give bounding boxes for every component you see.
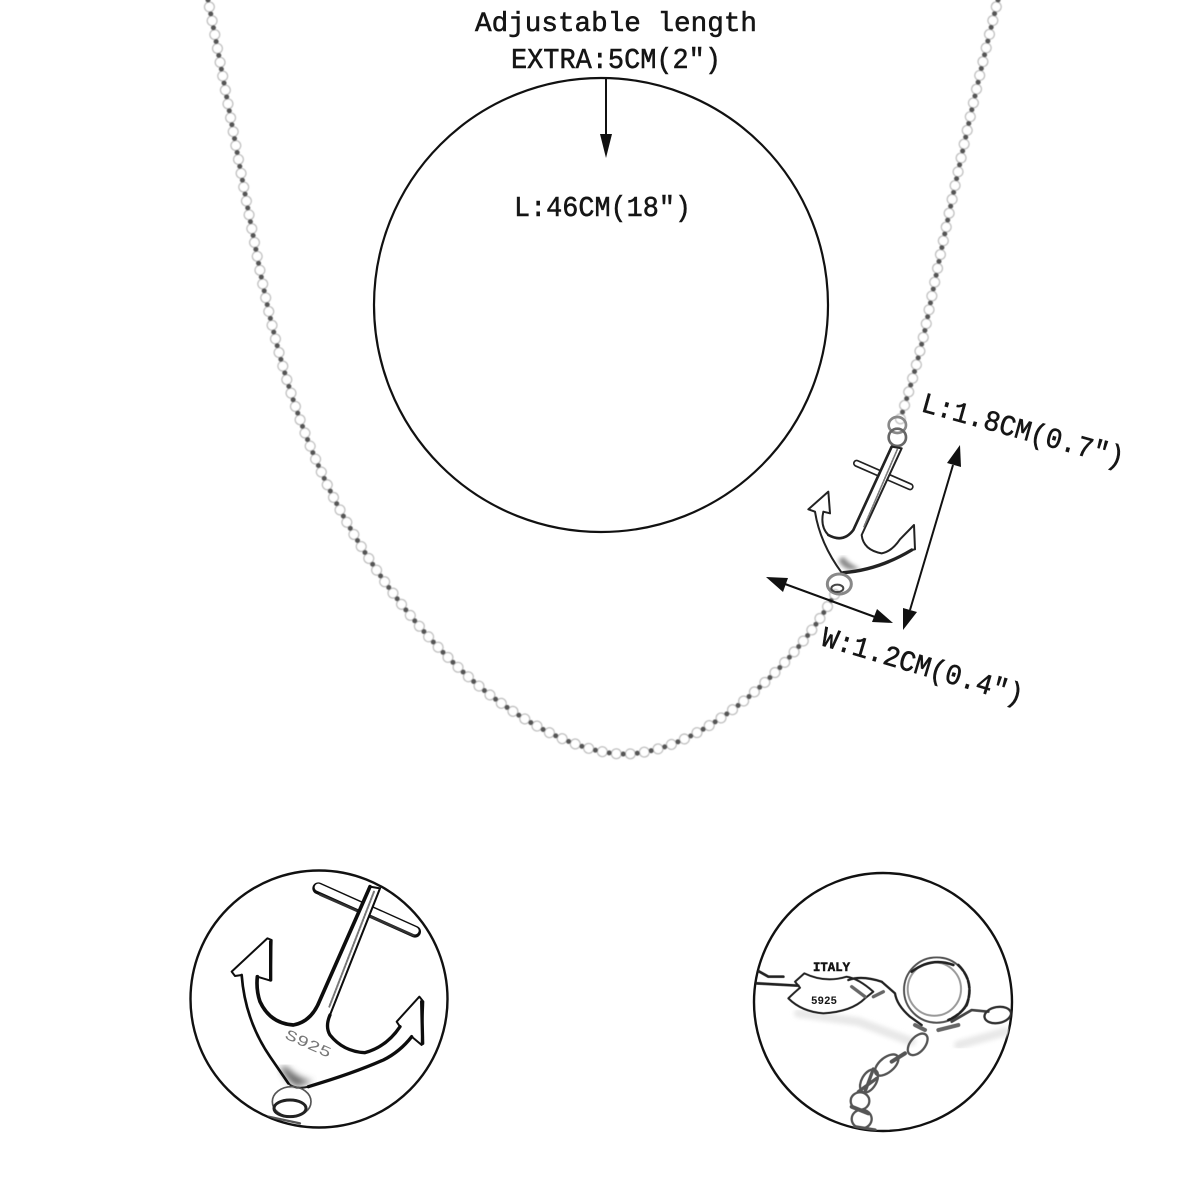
ITALY stamp: ITALY	[813, 960, 850, 975]
arrow: pendant length	[903, 445, 961, 630]
soft shadows	[798, 1013, 1005, 1045]
arrow: pendant width	[766, 577, 893, 623]
pendant width label: W:1.2CM(0.4")	[817, 622, 1027, 713]
small anchor pendant	[808, 417, 915, 594]
anchor close-up	[232, 887, 423, 1123]
necklace length label: L:46CM(18")	[514, 192, 691, 225]
spring ring	[904, 957, 969, 1023]
adjustable length label: Adjustable length	[475, 9, 757, 40]
circle outline	[374, 78, 828, 532]
arrow: adjustable extension	[600, 78, 612, 158]
detail circle: anchor close-up	[190, 870, 448, 1128]
S925 stamp: S925	[282, 1027, 334, 1062]
extra length label: EXTRA:5CM(2")	[511, 44, 721, 77]
hanging extension chain	[851, 1030, 931, 1130]
infographic canvas	[189, 0, 1120, 1132]
right links	[952, 1010, 988, 1022]
circle outline	[190, 870, 448, 1128]
pendant length label: L:1.8CM(0.7")	[918, 388, 1128, 476]
detail circle: clasp close-up	[754, 873, 1012, 1131]
clasp and chain	[757, 957, 1012, 1130]
necklace chain	[208, 0, 998, 754]
5925 stamp: 5925	[811, 996, 837, 1008]
large circle with length label	[374, 9, 828, 532]
circle outline	[754, 873, 1012, 1131]
tag and jump links	[788, 973, 873, 1013]
